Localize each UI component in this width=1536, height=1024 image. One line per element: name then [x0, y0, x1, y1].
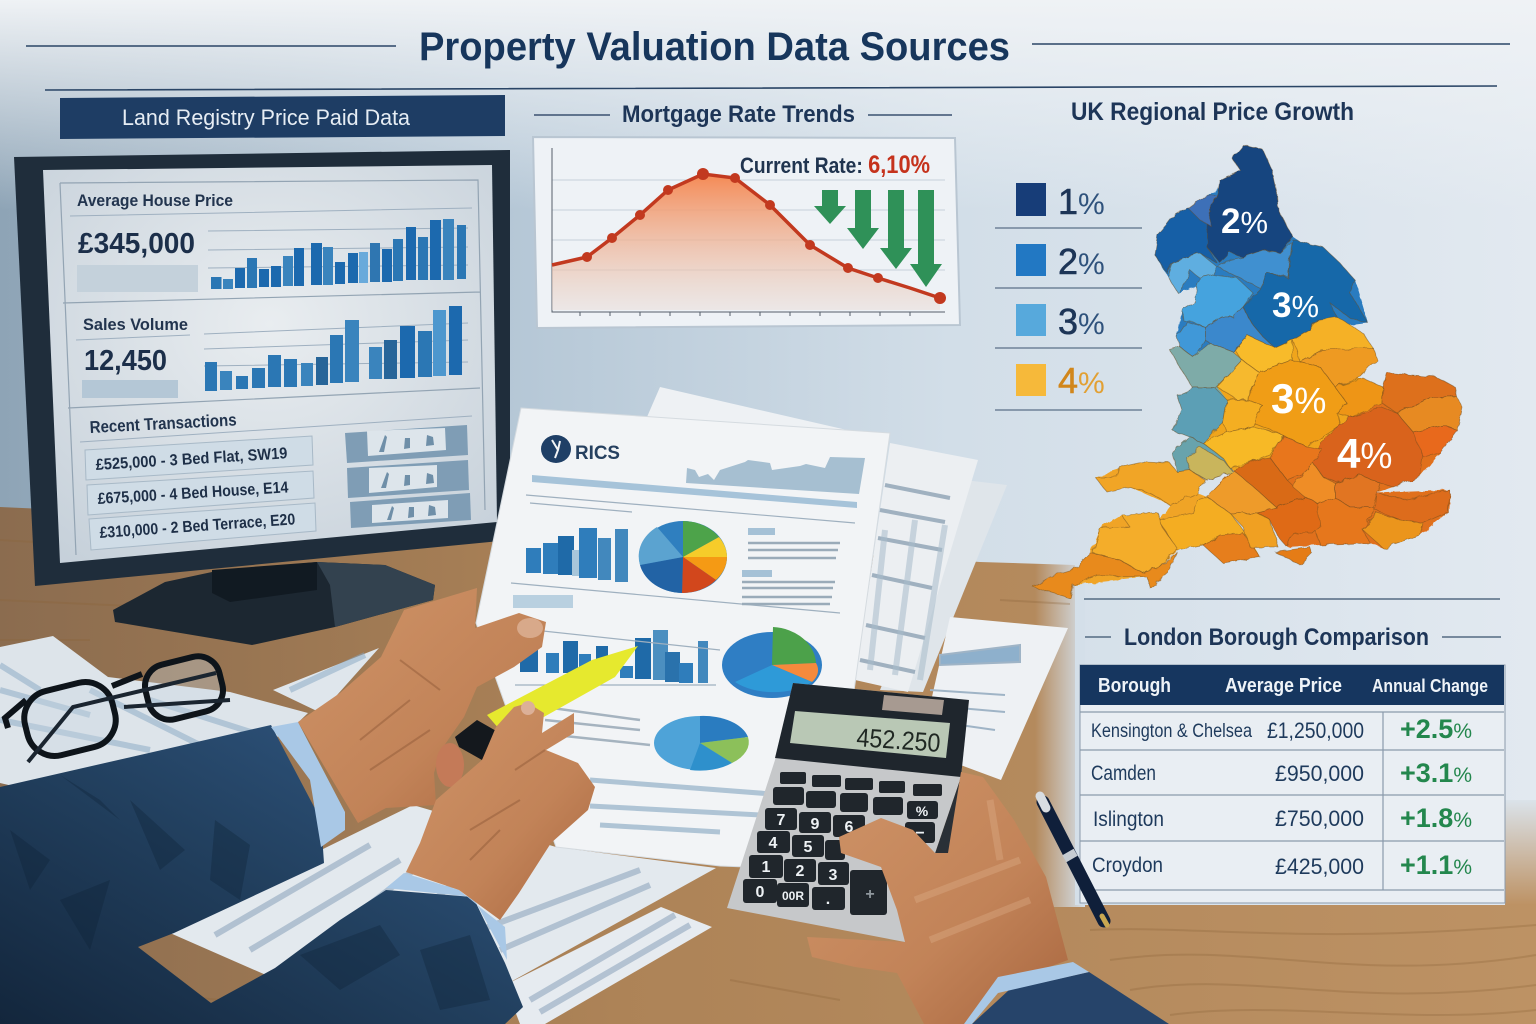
monitor — [14, 150, 510, 645]
card: average house price: Average House Price — [77, 191, 233, 210]
calculator key labels: % — [916, 803, 929, 819]
calculator key labels: 9 — [811, 816, 820, 833]
heading: London Borough Comparison — [1124, 624, 1429, 651]
report header skyline — [686, 457, 865, 494]
rows: Croydon — [1092, 854, 1163, 877]
legend item 3% — [1016, 301, 1105, 342]
right hand holding highlighter — [406, 701, 595, 920]
annual change values: +1.1% — [1400, 850, 1472, 880]
rows: £425,000 — [1275, 854, 1364, 879]
papers behind report — [647, 387, 1068, 780]
legend item 4% — [1016, 360, 1105, 401]
calculator key labels: + — [865, 886, 875, 903]
calculator display: 452.250 — [856, 722, 941, 758]
annual change values: +1.8% — [1400, 803, 1472, 833]
RICS logo — [541, 435, 620, 464]
calculator key labels: 2 — [796, 863, 805, 880]
panel: London borough comparison — [1080, 599, 1505, 903]
title: Property Valuation Data Sources — [419, 25, 1010, 69]
annual change values — [1400, 714, 1472, 880]
report header band — [532, 475, 857, 508]
annual change values: +2.5% — [1400, 714, 1472, 744]
map labels: 3% — [1271, 375, 1326, 422]
report pie 2 — [722, 627, 822, 698]
calculator key labels: 6 — [845, 819, 854, 836]
left hand holding report — [298, 588, 546, 823]
card: sales volume: 12,450 — [84, 345, 167, 377]
annual change values: +3.1% — [1400, 758, 1472, 788]
map labels — [1221, 202, 1392, 477]
rows: £1,250,000 — [1267, 718, 1364, 743]
report pie 1 — [639, 521, 727, 593]
row 1 — [85, 425, 468, 480]
calculator key labels: 00R — [782, 889, 804, 903]
legend item 3%: 3% — [1058, 301, 1105, 342]
map: England regional growth — [1033, 145, 1462, 598]
row 2: £675,000 - 4 Bed House, E14 — [97, 479, 289, 508]
calculator key labels: − — [915, 825, 925, 842]
papers on desk, left — [0, 636, 716, 1024]
table header: Borough — [1098, 675, 1171, 697]
card: recent transactions — [80, 410, 472, 550]
suit sleeve, right — [964, 962, 1169, 1024]
legend item 2% — [1016, 241, 1105, 282]
heading: Land Registry banner — [60, 95, 505, 139]
heading: UK regional price growth: UK Regional Price Growth — [1071, 98, 1354, 126]
rows — [1091, 718, 1364, 879]
monitor screen — [43, 165, 497, 563]
legend item 1% — [1016, 181, 1105, 222]
calculator key labels: 0 — [756, 884, 765, 901]
arrows: falling rate — [814, 190, 942, 287]
map labels: 2% — [1221, 202, 1268, 241]
suit sleeves, left — [0, 725, 523, 1024]
current rate label: Current Rate: 6,10% — [740, 151, 930, 179]
calculator key labels: 1 — [762, 859, 771, 876]
legend: price growth — [995, 181, 1142, 410]
glasses — [5, 652, 230, 762]
pen — [1040, 796, 1107, 925]
calculator key labels: 5 — [804, 839, 813, 856]
table header — [1098, 675, 1488, 697]
card: average house price — [70, 191, 472, 292]
rows: £750,000 — [1275, 806, 1364, 831]
map regions — [1033, 145, 1462, 598]
row 2 — [87, 460, 469, 515]
page table detail — [860, 485, 950, 672]
table header: Annual Change — [1372, 676, 1488, 696]
heading: mortgage rate trends: Mortgage Rate Trends — [622, 101, 855, 128]
calculator key labels: 4 — [769, 835, 778, 852]
report pie 3 — [654, 716, 749, 771]
calculator key labels — [756, 803, 929, 908]
title — [26, 25, 1510, 90]
monitor stand — [113, 562, 435, 645]
card: recent transactions: Recent Transactions — [89, 410, 237, 437]
card: sales volume — [76, 306, 468, 398]
rows: Islington — [1093, 808, 1164, 831]
heading: Land Registry banner: Land Registry Price Paid Data — [122, 105, 411, 130]
row 3 — [89, 493, 471, 550]
report bar chart 1 — [526, 528, 628, 582]
row 3: £310,000 - 2 Bed Terrace, E20 — [99, 511, 296, 542]
monitor frame — [14, 150, 510, 586]
wooden desk — [0, 507, 1536, 1024]
RICS logo: RICS — [575, 443, 620, 464]
calculator — [727, 683, 969, 945]
table — [1080, 665, 1505, 903]
report: RICS document — [476, 408, 890, 870]
right hand on calculator — [807, 772, 1068, 1024]
card: average house price: £345,000 — [78, 228, 195, 260]
row 1: £525,000 - 3 Bed Flat, SW19 — [95, 445, 288, 474]
rows: Kensington & Chelsea — [1091, 721, 1252, 742]
legend item 2%: 2% — [1058, 241, 1105, 282]
legend item 1%: 1% — [1058, 181, 1105, 222]
report text block — [742, 528, 775, 577]
rows: Camden — [1091, 762, 1156, 785]
page chart detail — [925, 645, 1020, 730]
highlighter — [455, 646, 638, 760]
map labels: 3% — [1272, 286, 1319, 325]
card: sales volume: Sales Volume — [83, 315, 188, 334]
table header: Average Price — [1225, 675, 1342, 697]
calculator key labels: 3 — [829, 867, 838, 884]
map labels: 4% — [1337, 430, 1392, 477]
chart: mortgage rate line — [533, 137, 960, 328]
shirt cuffs, left — [271, 722, 507, 960]
report bar chart 2 — [520, 630, 708, 683]
legend item 4%: 4% — [1058, 360, 1105, 401]
rows: £950,000 — [1275, 761, 1364, 786]
calculator key labels: 7 — [777, 812, 786, 829]
calculator key labels: . — [826, 891, 830, 908]
calculator keys — [743, 772, 942, 915]
